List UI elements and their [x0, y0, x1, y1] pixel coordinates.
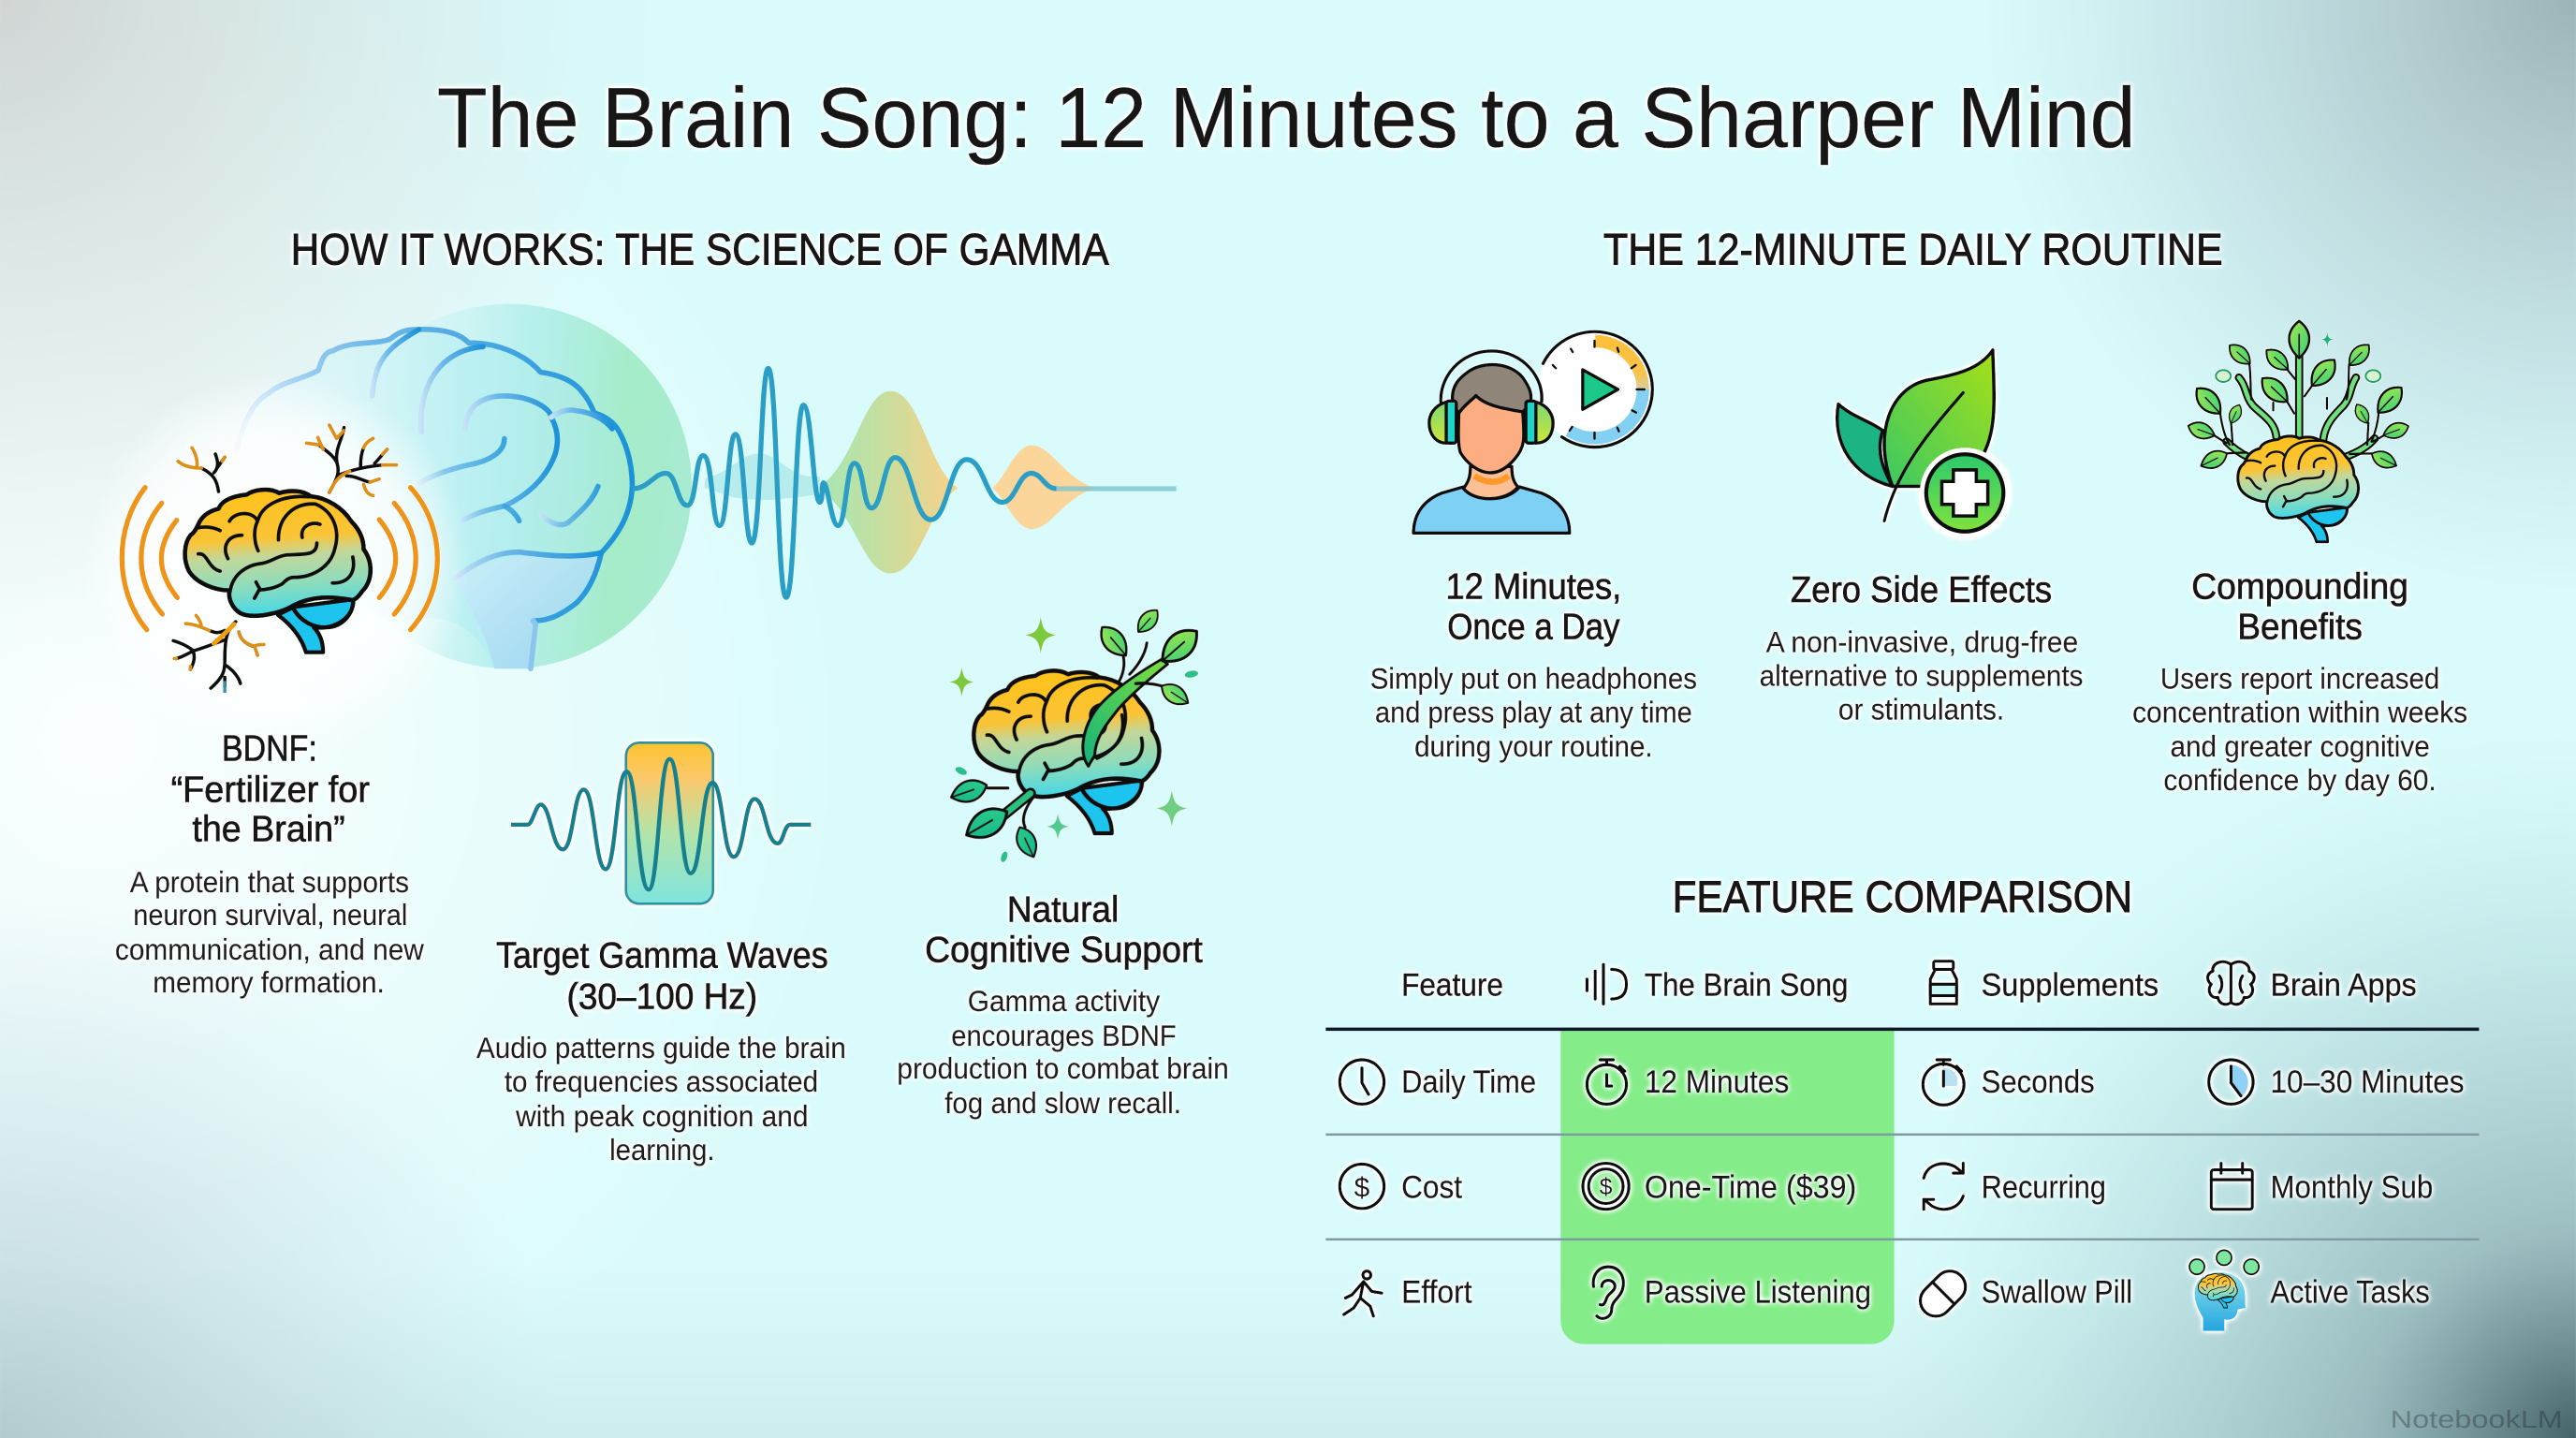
- text block: 12 minutes: Once a Day: [1447, 608, 1620, 648]
- text block: BDNF: A protein that supports: [130, 865, 409, 899]
- title: The Brain Song: 12 Minutes to a Sharper Mind: [437, 70, 2136, 166]
- text block: natural cognitive support: Gamma activity: [968, 984, 1160, 1018]
- icon: sound wave: [1587, 964, 1627, 1004]
- icon: supplement bottle: [1930, 961, 1956, 1004]
- cerebellum and brain stem: [455, 555, 601, 668]
- text block: 12 minutes: 12 Minutes,: [1445, 567, 1621, 608]
- icon: double ring dollar: [1583, 1164, 1629, 1210]
- icon: ear: [1593, 1267, 1623, 1318]
- sprout stems: [1083, 659, 1167, 766]
- illustration: large brain with sound wave: [82, 304, 1177, 761]
- text block: natural cognitive support: Natural: [1007, 890, 1119, 931]
- brain interior fill: [236, 330, 632, 668]
- text block: target gamma waves: Audio patterns guide the brain: [476, 1031, 846, 1064]
- brain outline: [236, 330, 632, 668]
- text block: 12 minutes: and press play at any time: [1375, 695, 1692, 728]
- sound arcs: [122, 488, 437, 630]
- text block: natural cognitive support: production to combat brain: [897, 1051, 1229, 1085]
- text block: 12 minutes: Simply put on headphones: [1370, 661, 1697, 695]
- text block: target gamma waves: to frequencies associated: [505, 1064, 818, 1098]
- text block: compounding benefits: [2132, 567, 2467, 797]
- row: effort: Passive Listening: [1645, 1275, 1871, 1311]
- row: daily time: [1339, 1060, 2465, 1105]
- stem: [1884, 392, 1963, 521]
- icon: recurring arrows: [1924, 1164, 1963, 1210]
- row: effort: [1344, 1250, 2430, 1331]
- row: daily time: Seconds: [1982, 1064, 2095, 1100]
- row: daily time: 10–30 Minutes: [2271, 1064, 2465, 1100]
- small leaf: [1837, 404, 1893, 486]
- row: effort: Swallow Pill: [1982, 1275, 2132, 1311]
- illustration: gamma wave band: [511, 742, 811, 903]
- text block: BDNF: neuron survival, neural: [133, 898, 407, 932]
- icon: leaf with plus: [1837, 350, 2010, 538]
- text block: target gamma waves: [476, 936, 846, 1167]
- neck: [1463, 466, 1518, 499]
- icon: stopwatch with wedge: [1923, 1060, 1964, 1105]
- icon: calendar: [2211, 1164, 2252, 1210]
- text block: natural cognitive support: [897, 890, 1229, 1120]
- leaves: [947, 605, 1205, 861]
- face: [1458, 396, 1524, 473]
- header row: Brain Apps: [2271, 968, 2417, 1004]
- text block: compounding benefits: concentration within weeks: [2132, 695, 2467, 728]
- text block: BDNF: [115, 729, 424, 999]
- icon: double ring dollar: $: [1600, 1175, 1613, 1200]
- text block: zero side effects: [1760, 570, 2083, 726]
- row: cost: Cost: [1401, 1169, 1462, 1205]
- gradient head disc: [327, 304, 692, 668]
- text block: target gamma waves: Target Gamma Waves: [496, 936, 828, 976]
- branches: [2214, 344, 2384, 457]
- icon: brain tree: [2186, 321, 2411, 542]
- row: cost: Recurring: [1982, 1169, 2106, 1205]
- body: [1413, 487, 1570, 533]
- text block: compounding benefits: Compounding: [2191, 567, 2408, 608]
- gamma wave line: [511, 759, 811, 889]
- header row: [1401, 961, 2417, 1005]
- white glow behind small brain: [82, 373, 470, 761]
- text block: zero side effects: Zero Side Effects: [1791, 570, 2052, 610]
- text block: zero side effects: A non-invasive, drug-free: [1766, 625, 2078, 659]
- icon: walking figure: [1344, 1271, 1382, 1316]
- row: daily time: 12 Minutes: [1645, 1064, 1789, 1100]
- row: effort: Effort: [1401, 1275, 1472, 1311]
- highlight column: [1560, 1030, 1895, 1344]
- icon: dollar coin: [1339, 1164, 1384, 1209]
- table rules: [1325, 1028, 2479, 1240]
- icon: brain outline: [2208, 961, 2254, 1005]
- row: cost: One-Time ($39): [1645, 1169, 1856, 1205]
- sound wave envelopes: [705, 453, 820, 500]
- sparkles: [949, 616, 1199, 863]
- dendrite branches: [173, 428, 388, 688]
- icon: clock: [1339, 1060, 1384, 1104]
- icon: person with headphones and play timer: [1413, 331, 1652, 533]
- text block: target gamma waves: (30–100 Hz): [567, 977, 757, 1018]
- big leaf: [1884, 350, 1994, 486]
- icon: pill: [1914, 1265, 1972, 1323]
- text block: zero side effects: alternative to supplements: [1760, 659, 2083, 693]
- text block: 12 minutes: during your routine.: [1414, 729, 1653, 763]
- text block: BDNF: communication, and new: [115, 932, 424, 966]
- text block: natural cognitive support: fog and slow recall.: [944, 1086, 1181, 1120]
- header row: Supplements: [1982, 968, 2159, 1004]
- heading: how it works: HOW IT WORKS: THE SCIENCE OF GAMMA: [291, 226, 1109, 275]
- small brain: [185, 490, 371, 653]
- illustration: brain with sprout: [947, 605, 1205, 863]
- icon: clock with blue wedge: [2209, 1060, 2253, 1104]
- timer ring with play: [1538, 331, 1652, 448]
- icon: stopwatch: [1587, 1060, 1627, 1104]
- icon: head with brain and task badges: [2189, 1250, 2259, 1331]
- text block: compounding benefits: Users report increased: [2160, 661, 2439, 695]
- text block: BDNF: BDNF:: [222, 729, 317, 770]
- frequency band: [626, 742, 713, 903]
- text block: natural cognitive support: encourages BDNF: [951, 1019, 1177, 1052]
- illustration: BDNF brain with dendrites: [122, 425, 437, 693]
- brain: [973, 670, 1159, 833]
- heading: feature comparison: FEATURE COMPARISON: [1673, 873, 2132, 922]
- text block: compounding benefits: and greater cognitive: [2170, 729, 2430, 763]
- text block: BDNF: memory formation.: [153, 965, 385, 999]
- icon: dollar coin: $: [1354, 1173, 1370, 1204]
- heading: daily routine: THE 12-MINUTE DAILY ROUTINE: [1603, 226, 2223, 275]
- brain: [2238, 436, 2359, 542]
- header row: Feature: [1401, 968, 1503, 1004]
- leaves: [2186, 321, 2411, 473]
- text block: BDNF: “Fertilizer for: [171, 770, 370, 810]
- watermark: NotebookLM: [2391, 1405, 2563, 1433]
- text block: 12 minutes: [1370, 567, 1697, 763]
- row: effort: Active Tasks: [2271, 1275, 2430, 1311]
- text block: natural cognitive support: Cognitive Support: [925, 931, 1203, 971]
- text block: target gamma waves: with peak cognition and: [515, 1099, 809, 1133]
- text block: compounding benefits: Benefits: [2237, 608, 2363, 648]
- table: feature comparison: [1325, 961, 2479, 1344]
- plus badge: [1920, 448, 2010, 538]
- hair: [1453, 364, 1531, 414]
- row: daily time: Daily Time: [1401, 1064, 1536, 1100]
- text block: zero side effects: or stimulants.: [1838, 693, 2004, 726]
- text block: compounding benefits: confidence by day 60.: [2163, 763, 2437, 797]
- header row: The Brain Song: [1645, 968, 1848, 1004]
- row: cost: [1339, 1164, 2433, 1210]
- headphones: [1429, 351, 1553, 443]
- text block: BDNF: the Brain”: [192, 810, 345, 850]
- wave tail: [1057, 487, 1177, 490]
- row: cost: Monthly Sub: [2271, 1169, 2433, 1205]
- text block: target gamma waves: learning.: [609, 1133, 714, 1167]
- sound wave line: [633, 368, 1057, 597]
